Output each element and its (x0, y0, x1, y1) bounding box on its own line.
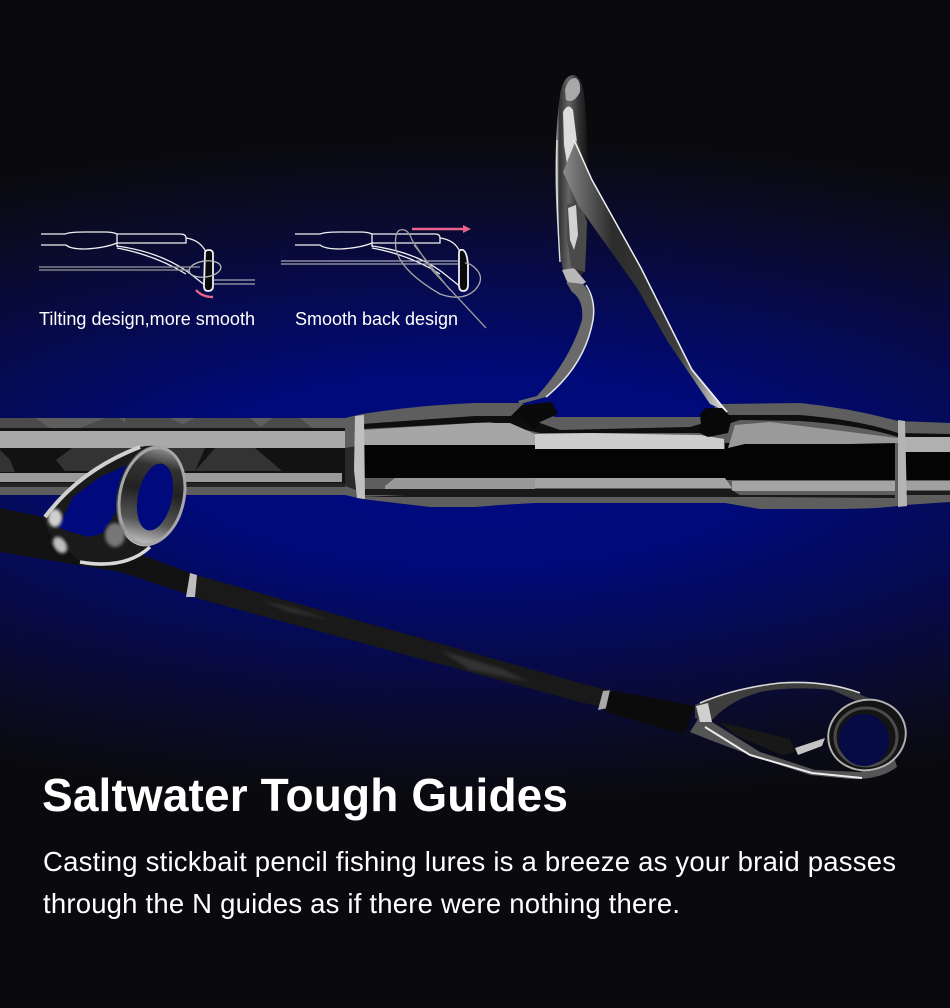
swell top black lines (362, 415, 950, 437)
foot left (511, 402, 558, 430)
frame curves (117, 238, 206, 286)
large guide with tilted ring (511, 75, 732, 437)
tip guide on lower rod (690, 682, 915, 780)
diagram: tilting design (39, 232, 255, 297)
rear foot (105, 523, 125, 547)
thread wrap right (898, 420, 907, 507)
wrap near tip (598, 690, 612, 710)
rod silhouette (0, 403, 950, 509)
wrap near top guide (186, 573, 197, 597)
light highlights (362, 423, 535, 445)
butt section (0, 508, 196, 597)
front leg (518, 282, 594, 404)
bright shoulder (563, 106, 582, 175)
frame opening (58, 465, 127, 537)
guide ring (459, 250, 468, 291)
pink arrow (412, 228, 464, 230)
diagram: smooth back design (281, 225, 486, 328)
pink arrow (196, 290, 213, 297)
main rod with guide wrap (0, 403, 950, 509)
frame (695, 683, 880, 725)
rod outline (41, 232, 186, 249)
description text: through the N guides as if there were nothing there. (43, 888, 680, 919)
ring opening (131, 460, 179, 534)
frame (43, 446, 184, 566)
frame curves (372, 238, 462, 288)
ring body (556, 75, 588, 283)
swell section black body (362, 443, 950, 480)
caption: tilting design: Tilting design,more smooth (39, 309, 255, 329)
dark carbon section (0, 448, 350, 486)
back leg strap (563, 140, 728, 412)
dark line and light stripe, left section (0, 428, 345, 431)
ring (819, 690, 915, 780)
thin carbon blank (196, 575, 607, 708)
rod outline (295, 232, 440, 249)
ring top highlight (565, 78, 580, 101)
small guide on lower rod (43, 439, 195, 566)
ring (107, 439, 195, 553)
line and loop (281, 261, 460, 264)
black wedge (720, 722, 795, 755)
description text: Casting stickbait pencil fishing lures is a breeze as your braid passes (43, 846, 896, 877)
thread wrap left (354, 415, 365, 499)
carbon hex pattern, top band (0, 418, 312, 428)
description text (43, 846, 896, 919)
ring neck (562, 268, 586, 292)
title: Saltwater Tough Guides (42, 769, 568, 821)
foot right (698, 408, 732, 437)
lower rod blank (0, 508, 695, 734)
guide ring (204, 250, 213, 291)
ring opening (839, 714, 889, 766)
line loop (188, 259, 222, 279)
tip black section (605, 690, 695, 734)
inner window (567, 203, 587, 272)
caption: smooth back design: Smooth back design (295, 309, 458, 329)
